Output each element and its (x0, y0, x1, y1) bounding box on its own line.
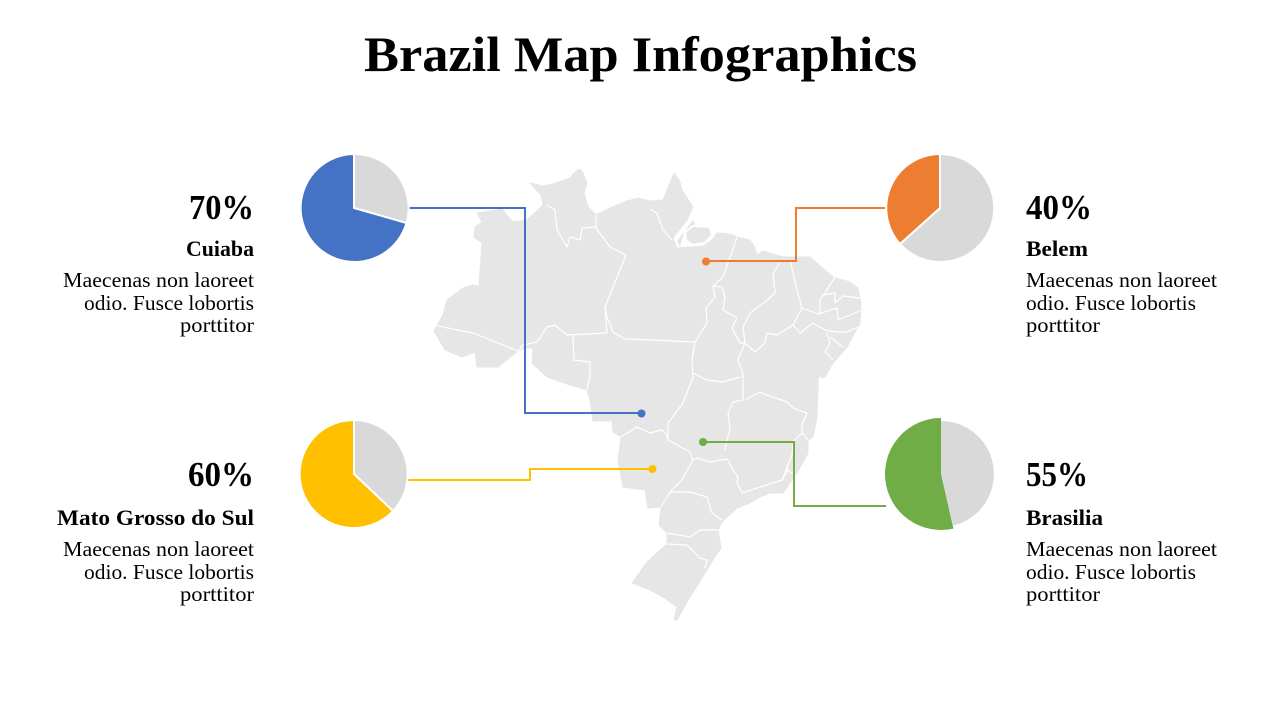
text block: Brasilia: 55% (1026, 455, 1088, 494)
text block: Belem: 40% (1026, 188, 1092, 227)
pie: Belem 40% (886, 154, 994, 262)
text block: Mato Grosso do Sul: Mato Grosso do Sul (57, 505, 254, 530)
text block: Cuiaba: Cuiaba (186, 236, 254, 261)
text block: Brasilia: Maecenas non laoreet (1026, 537, 1217, 561)
connector: blue (408, 208, 646, 418)
Marajo island (685, 226, 712, 245)
text block: Brasilia: porttitor (1026, 582, 1100, 606)
text block: Brasilia: Brasilia (1026, 505, 1103, 530)
text block: Belem (1026, 188, 1217, 337)
text block: Cuiaba (63, 188, 254, 337)
Amazon delta sliver (677, 220, 695, 247)
text block: Belem: Maecenas non laoreet (1026, 268, 1217, 292)
text block: Brasilia: odio. Fusce lobortis (1026, 560, 1196, 584)
text block: Belem: porttitor (1026, 313, 1100, 337)
connector: green (699, 438, 886, 506)
text block: Brasilia (1026, 455, 1217, 606)
text block: Belem: odio. Fusce lobortis (1026, 291, 1196, 315)
text block: Mato Grosso do Sul (57, 455, 254, 606)
connector: orange (702, 208, 885, 266)
pie: Brasilia 55% (885, 418, 994, 530)
text block: Mato Grosso do Sul: odio. Fusce lobortis (84, 560, 254, 584)
pie: Cuiaba 70% (301, 154, 409, 262)
text block: Cuiaba: porttitor (180, 313, 254, 337)
text block: Mato Grosso do Sul: 60% (188, 455, 254, 494)
text block: Belem: Belem (1026, 236, 1088, 261)
text block: Mato Grosso do Sul: porttitor (180, 582, 254, 606)
text block: Cuiaba: odio. Fusce lobortis (84, 291, 254, 315)
connector: yellow (408, 465, 656, 480)
text block: Mato Grosso do Sul: Maecenas non laoreet (63, 537, 254, 561)
text block: Cuiaba: 70% (189, 188, 254, 227)
pie: Mato Grosso do Sul 60% (300, 420, 408, 528)
text block: Cuiaba: Maecenas non laoreet (63, 268, 254, 292)
title: Brazil Map Infographics (364, 26, 917, 82)
map of Brazil (434, 169, 861, 620)
